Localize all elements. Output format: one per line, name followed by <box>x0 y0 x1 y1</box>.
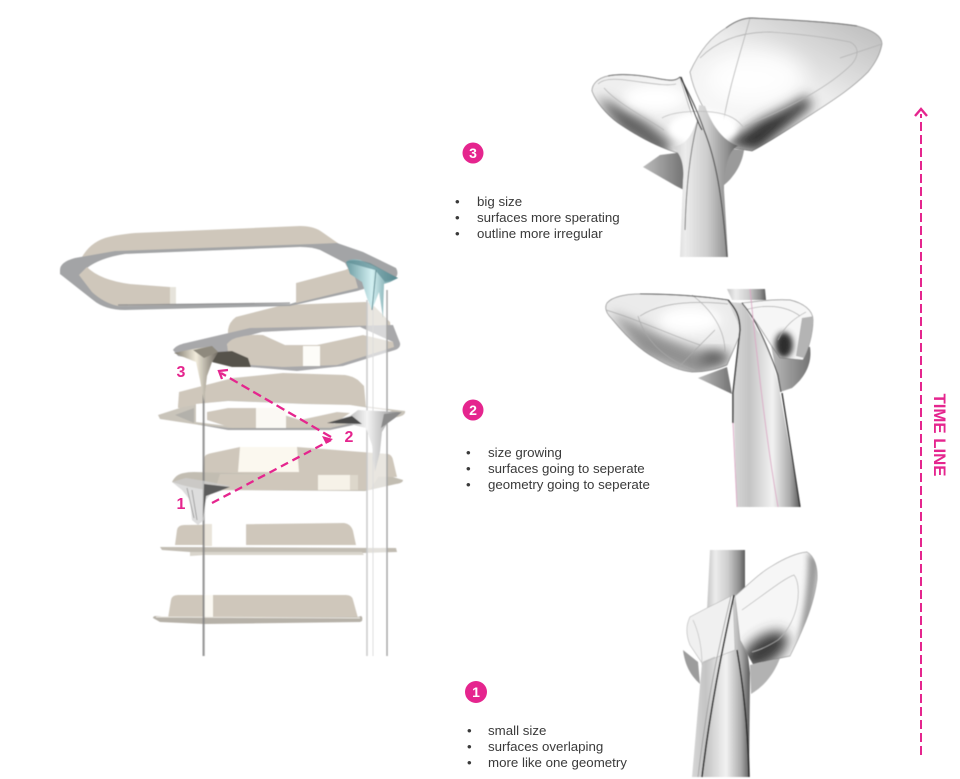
stage 3 bullet list: • <box>455 194 460 209</box>
stem <box>662 77 744 257</box>
neck bowl <box>669 111 737 145</box>
back fins <box>683 650 780 694</box>
badge 2: 2 <box>469 402 477 418</box>
stage 2 bullet list: • <box>466 445 471 460</box>
stage 1 bullet list: surfaces overlaping <box>488 739 603 754</box>
stage 2 bullet list: • <box>466 461 471 476</box>
badge 1 <box>465 681 487 703</box>
stem <box>728 289 800 507</box>
lower left fin <box>698 367 732 394</box>
arrow head <box>915 109 927 116</box>
time line arrow <box>915 109 949 755</box>
upper stem <box>727 289 766 300</box>
flare model stage 2 <box>606 289 815 507</box>
stage 1 bullet list <box>467 723 627 770</box>
stage 2 bullet list: • <box>466 477 471 492</box>
level 4 slab <box>172 447 403 491</box>
stage 3 bullet list: outline more irregular <box>477 226 603 241</box>
stage 2 bullet list <box>466 445 650 492</box>
badge 2 <box>462 400 484 420</box>
level 1 top ring slab <box>60 226 397 310</box>
flare: dark level four <box>172 478 230 525</box>
level 2 slab <box>173 302 400 371</box>
stage 3 bullet list: big size <box>477 194 522 209</box>
path arrows between flares <box>177 364 354 513</box>
arrow tip at 2 <box>322 436 333 444</box>
flare model stage 1 <box>683 550 820 777</box>
stage 1 bullet list: more like one geometry <box>488 755 627 770</box>
back fins <box>643 148 744 190</box>
level 3 slab <box>158 373 405 430</box>
badge 3 <box>462 142 484 164</box>
stage 1 bullet list: • <box>467 755 472 770</box>
badge 1: 1 <box>472 684 480 700</box>
dashed line 1 to 2 <box>212 440 331 503</box>
stage 3 bullet list: • <box>455 226 460 241</box>
badge 3: 3 <box>469 145 477 161</box>
stage 1 note <box>465 681 627 770</box>
right petal <box>742 300 815 360</box>
building axonometric <box>60 226 405 656</box>
left petal <box>592 75 700 158</box>
flare: grey level three <box>327 410 402 472</box>
stage 3 bullet list: • <box>455 210 460 225</box>
column: left structural line <box>202 372 205 656</box>
upper stem <box>707 550 745 610</box>
marker label 1: 1 <box>177 496 186 513</box>
right petal <box>690 18 882 152</box>
lower right bulge <box>770 340 810 392</box>
stage 2 bullet list: surfaces going to seperate <box>488 461 645 476</box>
flare: teal top <box>346 259 398 318</box>
left lobe <box>687 595 735 663</box>
time line label: TIME LINE <box>930 394 949 476</box>
lower body <box>687 595 750 777</box>
stage 3 bullet list: surfaces more sperating <box>477 210 620 225</box>
level 5 slab <box>160 523 397 556</box>
arrow head at 3 <box>219 370 228 379</box>
stage 3 bullet list <box>455 194 620 241</box>
stage 1 bullet list: • <box>467 739 472 754</box>
dashed line 2 to 3 <box>221 373 331 437</box>
flare: brown level two <box>174 346 251 402</box>
dashed axis <box>920 114 922 755</box>
column: right translucent shaft <box>367 290 387 656</box>
stage 2 note <box>462 400 650 492</box>
stage 2 bullet list: geometry going to seperate <box>488 477 650 492</box>
right petal <box>735 552 820 676</box>
marker label 2: 2 <box>345 429 354 446</box>
stage 1 bullet list: • <box>467 723 472 738</box>
marker label 3: 3 <box>177 364 186 381</box>
edge lines <box>693 595 749 777</box>
stage 1 bullet list: small size <box>488 723 546 738</box>
flare model stage 3 <box>592 18 882 257</box>
level 6 slab <box>153 595 362 624</box>
left petal <box>606 294 742 378</box>
stage 3 note <box>455 142 620 241</box>
stage 2 bullet list: size growing <box>488 445 562 460</box>
